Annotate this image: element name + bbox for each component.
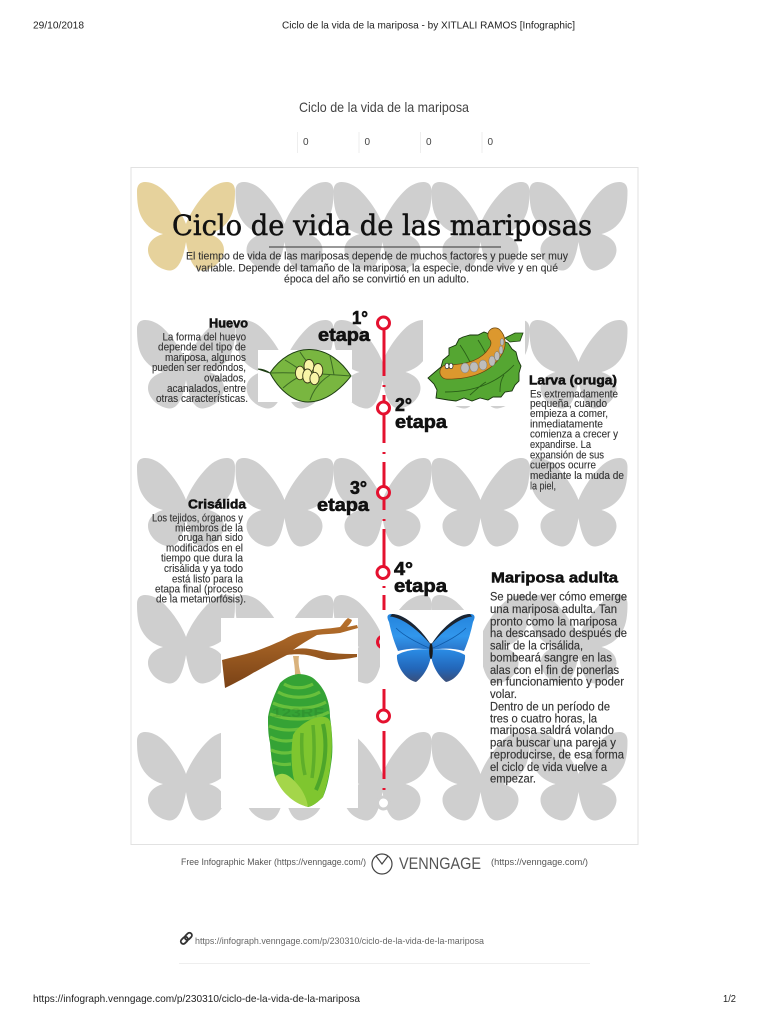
block: Mariposa adulta: ha descansado después de <box>490 626 627 640</box>
page header: date: 29/10/2018 <box>33 20 84 32</box>
page header: document title: Ciclo de la vida de la mariposa - by XITLALI RAMOS [Infographic] <box>282 20 575 32</box>
block: Larva: Larva (oruga) <box>529 372 617 388</box>
intro text: El tiempo de vida de las mariposas depende de muchos factores y puede ser muy <box>186 250 569 262</box>
page footer: page number: 1/2 <box>723 993 736 1005</box>
venngage wordmark: VENNGAGE <box>399 854 481 873</box>
block: Mariposa adulta: para buscar una pareja y <box>490 735 617 749</box>
block: Huevo: Huevo <box>209 316 248 330</box>
block: Huevo: pueden ser redondos, <box>152 362 246 374</box>
block: Larva: empieza a comer, <box>530 408 608 420</box>
block: Mariposa adulta: mariposa saldrá volando <box>490 723 614 737</box>
share counters: 0 <box>426 137 432 148</box>
block: Crisalida: Los tejidos, órganos y <box>152 513 244 525</box>
block: Mariposa adulta: Mariposa adulta <box>491 570 619 586</box>
block: Mariposa adulta: Se puede ver cómo emerge <box>490 590 627 604</box>
infographic url: https://infograph.venngage.com/p/230310/ciclo-de-la-vida-de-la-mariposa <box>195 936 485 947</box>
block: Huevo: mariposa, algunos <box>165 352 247 364</box>
intro text: época del año se convirtió en un adulto. <box>284 274 469 286</box>
image: blue morpho butterfly <box>380 610 483 688</box>
block: Larva: Es extremadamente <box>530 388 618 400</box>
block: Mariposa adulta: el ciclo de vida vuelve a <box>490 760 607 774</box>
block: Larva: inmediatamente <box>530 418 603 430</box>
stage 3 label: etapa <box>317 495 370 515</box>
block: Mariposa adulta: reproducirse, de esa forma <box>490 748 624 762</box>
page footer: url: https://infograph.venngage.com/p/230310/ciclo-de-la-vida-de-la-mariposa <box>33 993 360 1005</box>
stage 4 label <box>394 559 448 596</box>
block: Larva: expansión de sus <box>530 449 605 461</box>
watermark: 123RF <box>272 705 324 720</box>
footer: free infographic maker link: Free Infographic Maker (https://venngage.com/) <box>181 857 366 868</box>
block: Crisalida: etapa final (proceso <box>155 584 243 596</box>
block: Mariposa adulta: bombeará sangre en las <box>490 651 612 665</box>
block: Mariposa adulta: una mariposa adulta. Tan <box>490 602 617 616</box>
intro text <box>186 250 569 286</box>
block: Mariposa adulta: Dentro de un período de <box>490 699 610 713</box>
block: Mariposa adulta <box>490 570 627 786</box>
block: Huevo: otras características. <box>156 393 248 405</box>
block: Crisalida: Crisálida <box>188 496 247 512</box>
block: Crisalida: modificados en el <box>166 542 243 554</box>
share counters: 0 <box>303 137 309 148</box>
image: chrysalis on branch <box>221 618 358 808</box>
stage 1 label <box>318 308 371 345</box>
block: Mariposa adulta: pronto como la mariposa <box>490 614 617 628</box>
stage 2 label: etapa <box>395 412 448 432</box>
stage 3 label: 3° <box>350 478 367 498</box>
block: Larva: pequeña, cuando <box>530 398 607 410</box>
eggs <box>295 360 323 385</box>
block: Mariposa adulta: tres o cuatro horas, la <box>490 712 597 726</box>
block: Crisalida: está listo para la <box>172 573 243 585</box>
stage 1 label: etapa <box>318 325 371 345</box>
stage 2 label: 2° <box>395 395 412 415</box>
image: leaf with eggs <box>258 349 352 402</box>
stage 2 label <box>395 395 448 432</box>
block: Mariposa adulta: empezar. <box>490 772 536 786</box>
block: Mariposa adulta: volar. <box>490 687 517 701</box>
title: Ciclo de vida de las mariposas <box>172 209 592 242</box>
block: Mariposa adulta: alas con el fin de ponerlas <box>490 663 619 677</box>
block: Huevo <box>152 316 248 405</box>
block: Huevo: depende del tipo de <box>158 342 246 354</box>
image: caterpillar on leaf <box>423 320 525 406</box>
block: Crisalida: miembros de la <box>175 523 243 535</box>
stage 4 label: etapa <box>394 576 448 596</box>
block: Mariposa adulta: salir de la crisálida, <box>490 638 583 652</box>
share counters: 0 <box>488 137 494 148</box>
block: Huevo: ovalados, <box>204 372 246 384</box>
icon: venngage logo <box>372 854 392 874</box>
block: Crisalida: tiempo que dura la <box>161 553 243 565</box>
intro text: variable. Depende del tamaño de la mariposa, la especie, donde vive y en qué <box>196 262 558 274</box>
block: Larva: cuerpos ocurre <box>530 460 596 472</box>
block: Larva: expandirse. La <box>530 439 591 451</box>
block: Huevo: La forma del huevo <box>162 331 246 343</box>
timeline <box>377 317 390 809</box>
block: Larva: la piel, <box>530 480 556 492</box>
footer: venngage url: (https://venngage.com/) <box>491 857 588 868</box>
stage 1 label: 1° <box>352 308 368 328</box>
block: Mariposa adulta: en funcionamiento y poder <box>490 675 624 689</box>
stage 3 label <box>317 478 370 515</box>
block: Crisalida: oruga han sido <box>178 532 243 544</box>
icon: link <box>180 932 193 945</box>
block: Crisalida: crisálida y ya todo <box>164 563 243 575</box>
panel: infographic <box>131 168 638 844</box>
share counters: 0 <box>364 137 370 148</box>
chrysalis wing case <box>292 717 332 807</box>
block: Crisalida <box>152 496 247 606</box>
caterpillar body <box>447 335 498 372</box>
tan accent butterfly <box>137 182 235 271</box>
block: Larva: mediante la muda de <box>530 470 624 482</box>
share counters <box>298 132 494 153</box>
block: Huevo: acanalados, entre <box>167 383 246 395</box>
title rule <box>269 246 501 248</box>
chrysalis body <box>268 674 332 807</box>
block: Crisalida: de la metamorfósis). <box>156 594 246 606</box>
chrysalis tail patch <box>275 774 308 807</box>
page heading: Ciclo de la vida de la mariposa <box>299 99 469 115</box>
block: Larva <box>529 372 624 492</box>
block: Larva: comienza a crecer y <box>530 429 619 441</box>
stage 4 label: 4° <box>394 559 413 579</box>
background butterfly pattern <box>137 182 628 821</box>
